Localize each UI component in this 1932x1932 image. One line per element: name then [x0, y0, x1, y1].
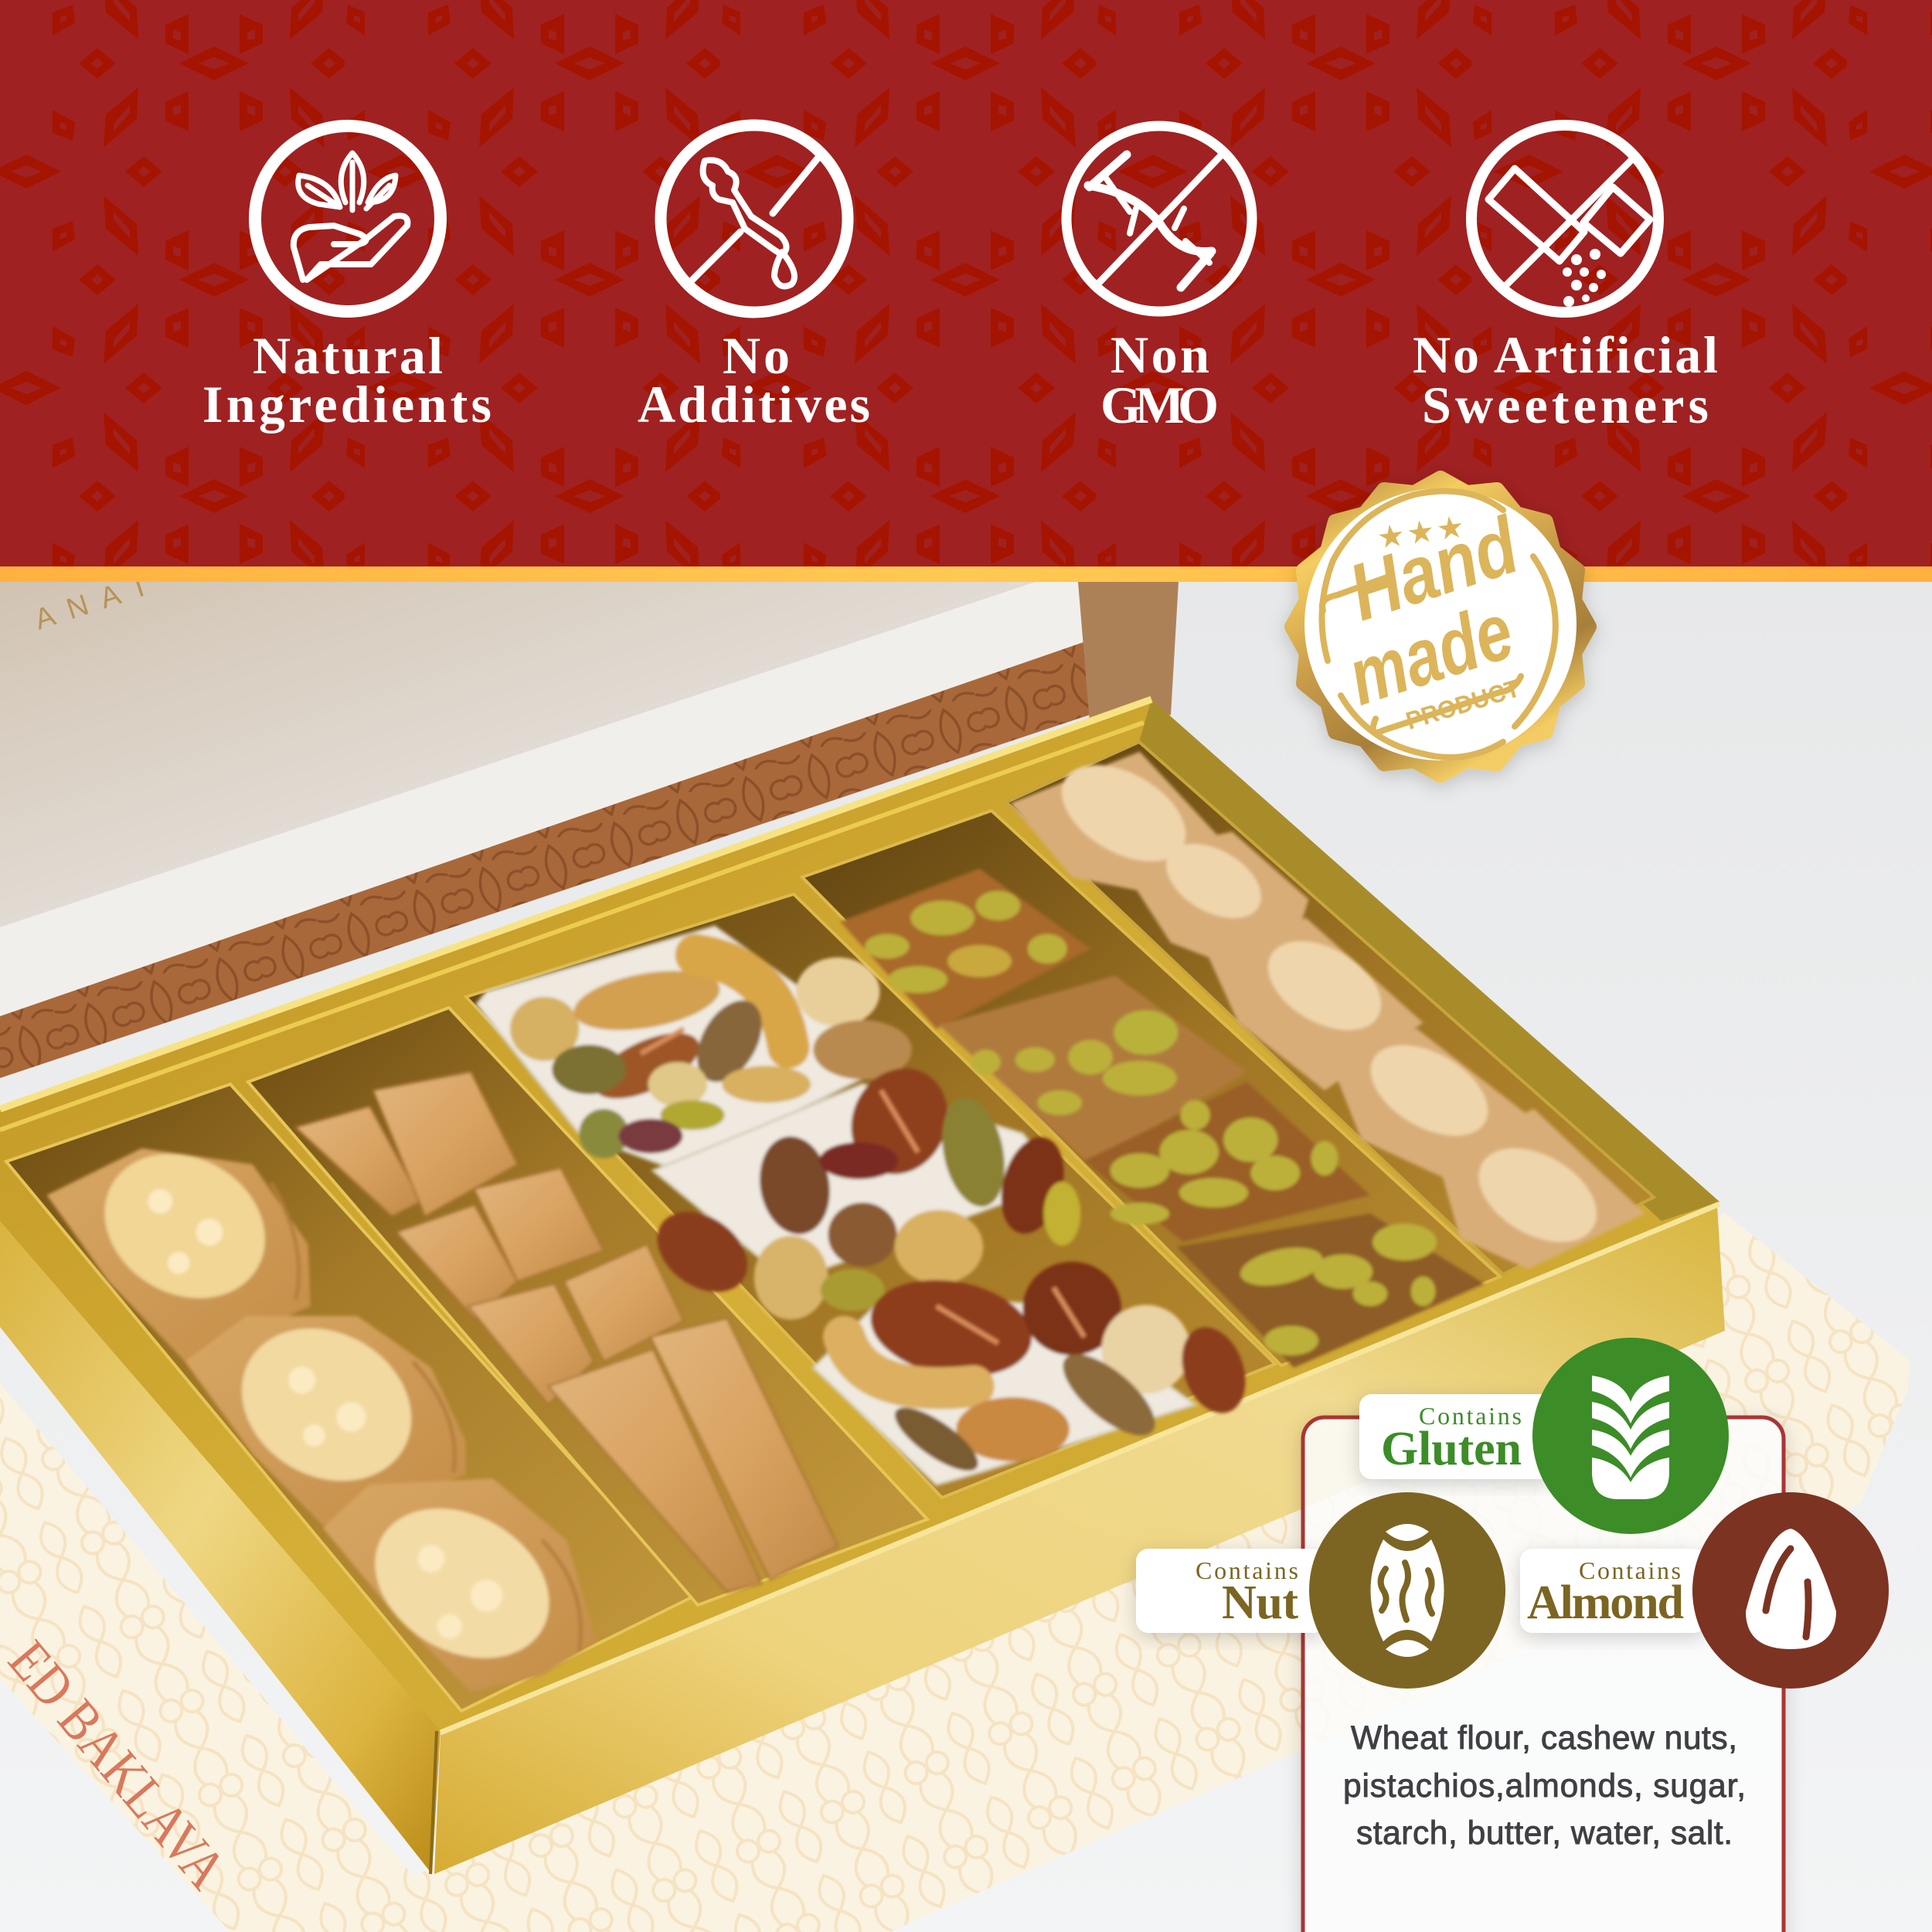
- rim highlight: back: [0, 699, 1151, 1109]
- label: natural ingredients: Natural: [253, 326, 443, 385]
- rim highlight: back inner shine: [0, 723, 1144, 1130]
- badge text: product: PRODUCT: [1403, 674, 1523, 735]
- label: contains almond: Almond: [1527, 1577, 1684, 1629]
- feature: non GMO: [1066, 126, 1252, 434]
- icon: crossed sweetener packets: [1471, 125, 1658, 312]
- badge ring: [1321, 492, 1556, 757]
- label: natural ingredients: Ingredients: [202, 375, 492, 434]
- badge white seal: [1304, 488, 1577, 760]
- banner gold strip: [0, 566, 1932, 582]
- compartment 5: [1006, 742, 1654, 1274]
- compartment 4: [802, 811, 1500, 1366]
- label: no additives: No: [723, 326, 790, 385]
- cream box base: right and front: [232, 1213, 1910, 1932]
- badge script: made: made: [1338, 586, 1523, 723]
- banner: red patterned band: [0, 0, 1932, 566]
- label: contains gluten: Gluten: [1381, 1423, 1522, 1475]
- ingredients text: Wheat flour, cashew nuts,: [1351, 1720, 1737, 1757]
- gold tray front face: [434, 1206, 1725, 1874]
- label: no artificial sweeteners: Sweeteners: [1422, 376, 1709, 434]
- brand mark on lid: ANAT: [31, 565, 166, 637]
- feature: no artificial sweeteners: [1413, 125, 1733, 434]
- lid interior: [0, 582, 1036, 927]
- icon: hand with leaves: [255, 126, 440, 311]
- lid brown corner column: [1078, 582, 1179, 723]
- food: [47, 745, 1645, 1692]
- icon: crossed DNA: [1066, 126, 1252, 311]
- cream box base: left side: [0, 1383, 464, 1932]
- photo: open baklava gift box: [0, 565, 1910, 1932]
- ingredients text: pistachios,almonds, sugar,: [1343, 1768, 1746, 1804]
- compartment 1: [6, 1084, 695, 1711]
- background: tabletop: [0, 572, 1932, 1932]
- compartment 3: [466, 894, 1275, 1498]
- allergen: gluten: [1359, 1338, 1729, 1534]
- pistachio baklava, fourth column: [840, 869, 1485, 1368]
- pill: nut label: [1136, 1549, 1325, 1633]
- badge gold scallop: [1292, 478, 1589, 775]
- ingredients text: starch, butter, water, salt.: [1356, 1815, 1733, 1852]
- label: contains gluten: Contains: [1419, 1402, 1522, 1430]
- label: no additives: Additives: [638, 375, 870, 434]
- label: contains nut: Nut: [1222, 1577, 1298, 1629]
- badge stars: ★★★: [1375, 509, 1469, 556]
- gold tray rim: [0, 699, 1719, 1731]
- lid brown patterned strip: [0, 641, 1136, 1078]
- label: non GMO: Non: [1111, 325, 1209, 384]
- label: contains almond: Contains: [1579, 1556, 1681, 1584]
- badge: hand made product: [1292, 478, 1589, 775]
- label: contains nut: Contains: [1196, 1556, 1298, 1584]
- icon: cashew nut: [1309, 1492, 1505, 1689]
- compartment 2: [248, 1008, 927, 1605]
- gold tray left face: [0, 1217, 440, 1874]
- icon: almond: [1692, 1492, 1889, 1689]
- rolled baklava, right column: [1010, 745, 1645, 1269]
- allergen: almond: [1520, 1492, 1889, 1689]
- icon: wheat: [1532, 1338, 1729, 1534]
- tray corner fold: [430, 1731, 437, 1874]
- rim highlight: front: [440, 1204, 1719, 1733]
- badge script: hand: Hand: [1339, 500, 1530, 638]
- panel: ingredients card: [1303, 1417, 1784, 1932]
- rolled baklava, left column: [47, 1125, 597, 1692]
- paper cups: [477, 927, 1196, 1485]
- rolled cones, second column: [296, 1072, 838, 1592]
- pill: gluten label: [1359, 1394, 1553, 1479]
- card frame: [1303, 1417, 1784, 1932]
- rim right olive band: [1139, 699, 1719, 1221]
- pill: almond label: [1520, 1549, 1706, 1633]
- feature: natural ingredients: [202, 126, 492, 434]
- icon: crossed dropper: [661, 125, 848, 312]
- label: non GMO: GMO: [1100, 376, 1219, 434]
- allergen: nut: [1136, 1492, 1505, 1689]
- label: no artificial sweeteners: No Artificial: [1413, 325, 1718, 384]
- feature: no additives: [638, 125, 870, 434]
- mixed nuts, centre column: [510, 955, 1257, 1481]
- lid white band: [0, 582, 1086, 1016]
